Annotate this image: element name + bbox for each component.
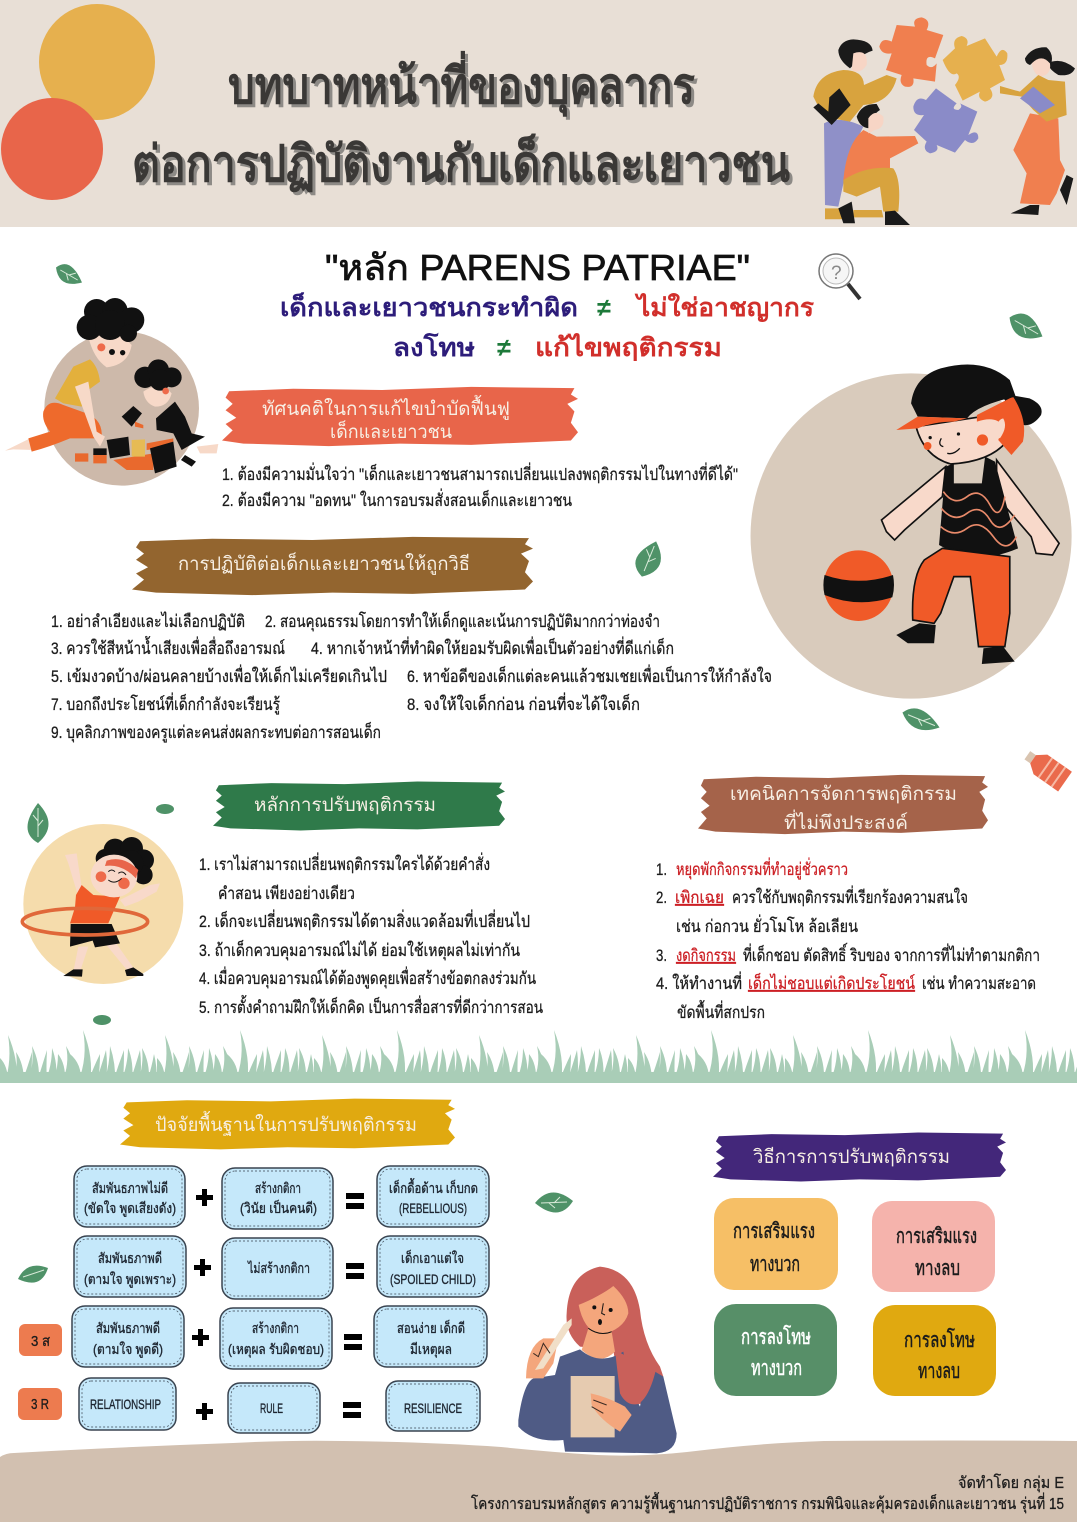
factor equation row 3: สอนง่าย เด็กดี — [397, 1319, 465, 1336]
illustration: two children playing with blocks — [5, 298, 218, 486]
factor equation row 3: มีเหตุผล — [410, 1341, 452, 1358]
title: บทบาทหน้าที่ของบุคลากร — [228, 51, 695, 117]
subheading line 2: ≠ — [497, 334, 511, 362]
title: ต่อการปฏิบัติงานกับเด็กและเยาวชน — [135, 136, 793, 195]
illustration: boy with ball — [751, 364, 1072, 699]
factor equation row 1: สัมพันธภาพไม่ดี — [92, 1180, 168, 1196]
card: positive reinforcement: การเสริมแรง — [733, 1220, 815, 1243]
title: ต่อการปฏิบัติงานกับเด็กและเยาวชน — [132, 133, 790, 192]
standing man — [824, 120, 863, 207]
card: negative reinforcement: ทางลบ — [915, 1257, 960, 1280]
factor equation row 2: ไม่สร้างกติกา — [247, 1260, 310, 1276]
card: positive punishment — [714, 1304, 837, 1396]
subheading line 1: ≠ — [597, 294, 611, 322]
factor equation row 3: (เหตุผล รับผิดชอบ) — [228, 1341, 324, 1358]
card: negative reinforcement — [872, 1201, 995, 1292]
section banner: handling unwanted behaviour: ที่ไม่พึงประสงค์ — [784, 809, 908, 834]
section banner: proper practice: การปฏิบัติต่อเด็กและเยาวชนให้ถูกวิธี — [178, 551, 470, 575]
factor equation row 4: RELATIONSHIP — [90, 1396, 161, 1412]
icon: leaf beside hula kid — [28, 803, 48, 843]
illustration: thinking woman — [518, 1267, 677, 1453]
list: handling unwanted behaviour: 4. ให้ทำงานที่ — [656, 971, 742, 993]
list: handling unwanted behaviour: หยุดพักกิจกรรมที่ทำอยู่ชั่วคราว — [676, 857, 848, 880]
footer band — [0, 1440, 1077, 1522]
section banner: handling unwanted behaviour: เทคนิคการจัดการพฤติกรรม — [730, 784, 957, 805]
card: negative punishment — [873, 1305, 996, 1396]
factor equation row 2: สัมพันธภาพดี — [98, 1250, 162, 1266]
section banner: behaviour modification methods — [713, 1133, 1006, 1181]
list: behaviour modification principles: 4. เมื่อควบคุมอารมณ์ได้ต้องพูดคุยเพื่อสร้างข้อตกลงร่วมกัน — [199, 966, 536, 989]
subheading line 2: ลงโทษ — [393, 332, 475, 362]
icon: bottle — [1020, 745, 1072, 791]
label: 3 ส: 3 ส — [31, 1333, 50, 1350]
list: handling unwanted behaviour: 2. — [656, 888, 667, 907]
list: handling unwanted behaviour: ขัดพื้นที่สกปรก — [677, 1000, 765, 1022]
card: positive punishment: ทางบวก — [751, 1357, 802, 1380]
list: behaviour modification principles: คำสอน เพียงอย่างเดียว — [218, 884, 355, 903]
list: proper practice: 4. หากเจ้าหน้าที่ทำผิดให้ยอมรับผิดเพื่อเป็นตัวอย่างที่ดีแก่เด็ก — [311, 636, 674, 658]
subheading line 2 — [393, 332, 722, 362]
card: positive reinforcement: ทางบวก — [750, 1253, 800, 1276]
icon: magnifying glass — [819, 254, 860, 299]
icon: leaf centre — [631, 537, 667, 581]
red circle — [1, 98, 103, 200]
card: negative punishment: ทางลบ — [918, 1360, 960, 1383]
factor equation row 3: (ตามใจ พูดดี) — [93, 1341, 163, 1358]
list: handling unwanted behaviour: ควรใช้กับพฤติกรรมที่เรียกร้องความสนใจ — [732, 885, 968, 907]
list: attitude — [222, 462, 738, 510]
list: behaviour modification principles: 2. เด็กจะเปลี่ยนพฤติกรรมได้ตามสิ่งแวดล้อมที่เปลี่ยนไป — [199, 909, 530, 931]
label: 3 ส — [19, 1324, 62, 1356]
list: handling unwanted behaviour — [656, 857, 1040, 1022]
icon: small leaf two — [93, 1015, 111, 1025]
hula hoop — [22, 908, 148, 935]
woman — [1011, 47, 1075, 215]
list: proper practice: 9. บุคลิกภาพของครูแต่ละคนส่งผลกระทบต่อการสอนเด็ก — [51, 721, 381, 743]
label: 3 R: 3 R — [31, 1396, 49, 1413]
header banner — [0, 0, 1077, 227]
factor equation row 1: สร้างกติกา — [255, 1180, 301, 1196]
section banner: fundamental factors: ปัจจัยพื้นฐานในการปรับพฤติกรรม — [155, 1111, 417, 1136]
factor equation row 2: (ตามใจ พูดเพราะ) — [84, 1271, 176, 1288]
subheading line 1 — [280, 292, 815, 322]
list: handling unwanted behaviour: เพิกเฉย — [675, 888, 724, 907]
card: negative reinforcement: การเสริมแรง — [896, 1225, 977, 1248]
section banner: fundamental factors — [120, 1099, 455, 1149]
list: behaviour modification principles: 3. ถ้าเด็กควบคุมอารมณ์ไม่ได้ ย่อมใช้เหตุผลไม่เท่ากัน — [199, 939, 520, 961]
illustration: child with hula hoop — [22, 824, 183, 984]
list: handling unwanted behaviour: เช่น ก่อกวน ยั่วโมโห ล้อเลียน — [676, 914, 858, 936]
factor equation row 3: สร้างกติกา — [252, 1320, 299, 1336]
factor equation row 1: (วินัย เป็นคนดี) — [240, 1199, 317, 1216]
list: proper practice: 5. เข้มงวดบ้าง/ผ่อนคลายบ้างเพื่อให้เด็กไม่เครียดเกินไป — [51, 664, 387, 686]
list: proper practice — [51, 610, 772, 743]
ball — [823, 550, 894, 621]
factor equation row 1: (REBELLIOUS) — [399, 1200, 467, 1216]
icon: magnifying glass: ? — [831, 263, 842, 284]
section banner: attitude — [222, 387, 578, 446]
list: handling unwanted behaviour: เช่น ทำความสะอาด — [922, 974, 1036, 993]
factor equation row 3 — [72, 1306, 487, 1369]
factor equation row 4: RULE — [260, 1400, 283, 1416]
section banner: handling unwanted behaviour — [698, 775, 988, 834]
subheading line 2: แก้ไขพฤติกรรม — [535, 332, 722, 362]
main heading: Parens Patriae — [280, 247, 815, 362]
card: negative punishment: การลงโทษ — [904, 1328, 975, 1352]
list: proper practice: 2. สอนคุณธรรมโดยการทำให้เด็กดูและเน้นการปฏิบัติมากกว่าท่องจำ — [265, 610, 660, 632]
icon: leaf lower left — [18, 1266, 48, 1283]
list: proper practice: 3. ควรใช้สีหน้าน้ำเสียงเพื่อสื่อถึงอารมณ์ — [51, 636, 285, 658]
subheading line 1: ไม่ใช่อาชญากร — [634, 292, 815, 322]
factor equation row 2 — [74, 1236, 489, 1299]
list: proper practice: 1. อย่าลำเอียงและไม่เลือกปฏิบัติ — [51, 611, 245, 631]
list: behaviour modification principles — [199, 852, 543, 1017]
factor equation row 1: (ขัดใจ พูดเสียงดัง) — [84, 1200, 176, 1217]
list: attitude: 1. ต้องมีความมั่นใจว่า "เด็กและเยาวชนสามารถเปลี่ยนแปลงพฤติกรรมไปในทางที่ดีได้" — [222, 462, 738, 484]
list: behaviour modification principles: 5. การตั้งคำถามฝึกให้เด็กคิด เป็นการสื่อสารที่ดีกว่าการสอน — [199, 995, 543, 1017]
list: proper practice: 6. หาข้อดีของเด็กแต่ละคนแล้วชมเชยเพื่อเป็นการให้กำลังใจ — [407, 664, 772, 686]
label: 3 R — [18, 1388, 62, 1420]
title: บทบาทหน้าที่ของบุคลากร — [231, 54, 698, 120]
icon: leaf top right — [1004, 308, 1048, 346]
main heading: Parens Patriae: "หลัก PARENS PATRIAE" — [325, 247, 750, 288]
list: proper practice: 7. บอกถึงประโยชน์ที่เด็กกำลังจะเรียนรู้ — [51, 692, 280, 715]
factor equation row 3: สัมพันธภาพดี — [96, 1320, 160, 1336]
icon: small leaf one — [156, 804, 174, 814]
section banner: behaviour modification principles: หลักการปรับพฤติกรรม — [254, 795, 436, 816]
factor equation row 1 — [74, 1166, 489, 1229]
icon: leaf under boy — [899, 704, 943, 736]
card: positive punishment: การลงโทษ — [741, 1325, 811, 1349]
factor equation row 4: RESILIENCE — [404, 1400, 462, 1416]
section banner: proper practice — [132, 537, 533, 595]
factor equation row 4 — [79, 1378, 480, 1433]
list: attitude: 2. ต้องมีความ "อดทน" ในการอบรมสั่งสอนเด็กและเยาวชน — [222, 488, 572, 510]
factor equation row 1: เด็กดื้อด้าน เก็บกด — [389, 1178, 478, 1196]
list: handling unwanted behaviour: เด็กไม่ชอบแต่เกิดประโยชน์ — [748, 972, 915, 993]
card: positive reinforcement — [714, 1198, 838, 1290]
footer credit: จัดทำโดย กลุ่ม E — [958, 1473, 1064, 1493]
crouching man — [843, 130, 918, 180]
title — [132, 51, 793, 195]
icon: leaf top left — [52, 260, 86, 290]
section banner: attitude: เด็กและเยาวชน — [330, 419, 452, 443]
list: handling unwanted behaviour: 1. — [656, 860, 667, 879]
subheading line 1: เด็กและเยาวชนกระทำผิด — [280, 292, 578, 322]
list: handling unwanted behaviour: งดกิจกรรม — [676, 946, 736, 965]
section banner: attitude: ทัศนคติในการแก้ไขบำบัดฟื้นฟู — [262, 395, 510, 420]
section banner: behaviour modification principles — [213, 782, 505, 830]
section banner: behaviour modification methods: วิธีการการปรับพฤติกรรม — [753, 1146, 950, 1168]
list: proper practice: 8. จงให้ใจเด็กก่อน ก่อนที่จะได้ใจเด็ก — [407, 692, 640, 714]
grass strip — [0, 1030, 1077, 1083]
factor equation row 2: เด็กเอาแต่ใจ — [401, 1249, 464, 1266]
icon: leaf lower centre — [535, 1192, 573, 1213]
yellow circle — [39, 4, 155, 120]
illustration: team with puzzle pieces — [813, 17, 1075, 225]
list: behaviour modification principles: 1. เราไม่สามารถเปลี่ยนพฤติกรรมใครได้ด้วยคำสั่ง — [199, 852, 490, 874]
factor equation row 2: (SPOILED CHILD) — [390, 1271, 476, 1287]
list: handling unwanted behaviour: 3. — [656, 946, 667, 965]
